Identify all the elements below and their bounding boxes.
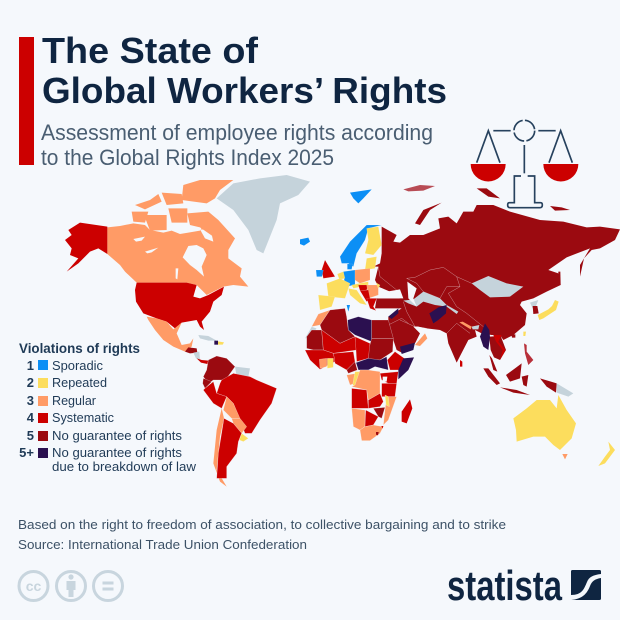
Indochina xyxy=(489,336,506,360)
legend row: breakdown of law: No guarantee of rights xyxy=(52,445,182,460)
Greenland xyxy=(217,175,310,253)
statista logo: statista xyxy=(447,562,563,609)
subtitle xyxy=(41,120,433,170)
legend title: Violations of rights xyxy=(19,341,140,356)
legend row: systematic: 4 xyxy=(27,410,35,425)
Hudson Bay and Canadian lakes xyxy=(133,229,213,279)
Malay peninsula and Indonesia xyxy=(489,355,497,372)
legend row: no guarantee: No guarantee of rights xyxy=(52,428,182,443)
legend row: breakdown of law xyxy=(19,445,197,474)
footnote and source xyxy=(18,517,506,552)
Canada mainland xyxy=(107,223,248,295)
icon: scales of justice xyxy=(471,120,578,208)
legend row: regular: Regular xyxy=(52,393,97,408)
grey no-data Asia xyxy=(403,276,523,329)
legend row: repeated: 2 xyxy=(27,375,34,390)
country borders xyxy=(378,267,483,333)
icon: creative commons licence: cc xyxy=(26,578,41,594)
subtitle: Assessment of employee rights according xyxy=(41,120,433,145)
title: Global Workers’ Rights xyxy=(42,70,447,111)
subtitle: to the Global Rights Index 2025 xyxy=(41,145,334,170)
legend xyxy=(19,341,197,474)
legend row: sporadic: Sporadic xyxy=(52,358,103,373)
title accent bar xyxy=(19,37,34,165)
Korea and Japan xyxy=(530,300,538,308)
Mexico xyxy=(147,317,193,352)
Northern and Western Europe xyxy=(300,189,382,312)
Philippines xyxy=(524,343,533,365)
Eurasia main landmass xyxy=(373,185,620,363)
legend row: repeated: Repeated xyxy=(52,375,107,390)
map: Europe, Asia, Africa, Oceania xyxy=(300,185,620,466)
world map xyxy=(65,175,620,487)
icon: creative commons licence xyxy=(19,572,122,600)
West and South Asia highlights xyxy=(388,305,472,367)
USA and Alaska xyxy=(65,223,224,330)
Australia and New Zealand xyxy=(513,395,615,466)
legend row: systematic: Systematic xyxy=(52,410,114,425)
legend row: sporadic: 1 xyxy=(27,358,34,373)
icon: statista mark xyxy=(571,570,601,600)
map: East and South-East Asia xyxy=(480,300,573,397)
footnote and source: Source: International Trade Union Confederation xyxy=(18,537,307,552)
map: Americas xyxy=(65,175,310,487)
legend row: regular xyxy=(27,393,97,408)
legend row: breakdown of law: 5+ xyxy=(19,445,34,460)
legend row: regular: 3 xyxy=(27,393,34,408)
Central America and Caribbean xyxy=(185,335,224,364)
South America xyxy=(203,356,277,487)
title: The State of xyxy=(42,30,259,71)
legend row: sporadic xyxy=(27,358,103,373)
legend row: breakdown of law: due to breakdown of law xyxy=(52,459,197,474)
Africa xyxy=(305,308,414,441)
footnote and source: Based on the right to freedom of association, to collective bargaining and to strike xyxy=(18,517,506,532)
inland seas xyxy=(377,282,420,333)
title xyxy=(42,30,447,111)
map: Canadian Arctic islands xyxy=(132,180,235,243)
legend row: no guarantee: 5 xyxy=(27,428,34,443)
legend row: repeated xyxy=(27,375,107,390)
